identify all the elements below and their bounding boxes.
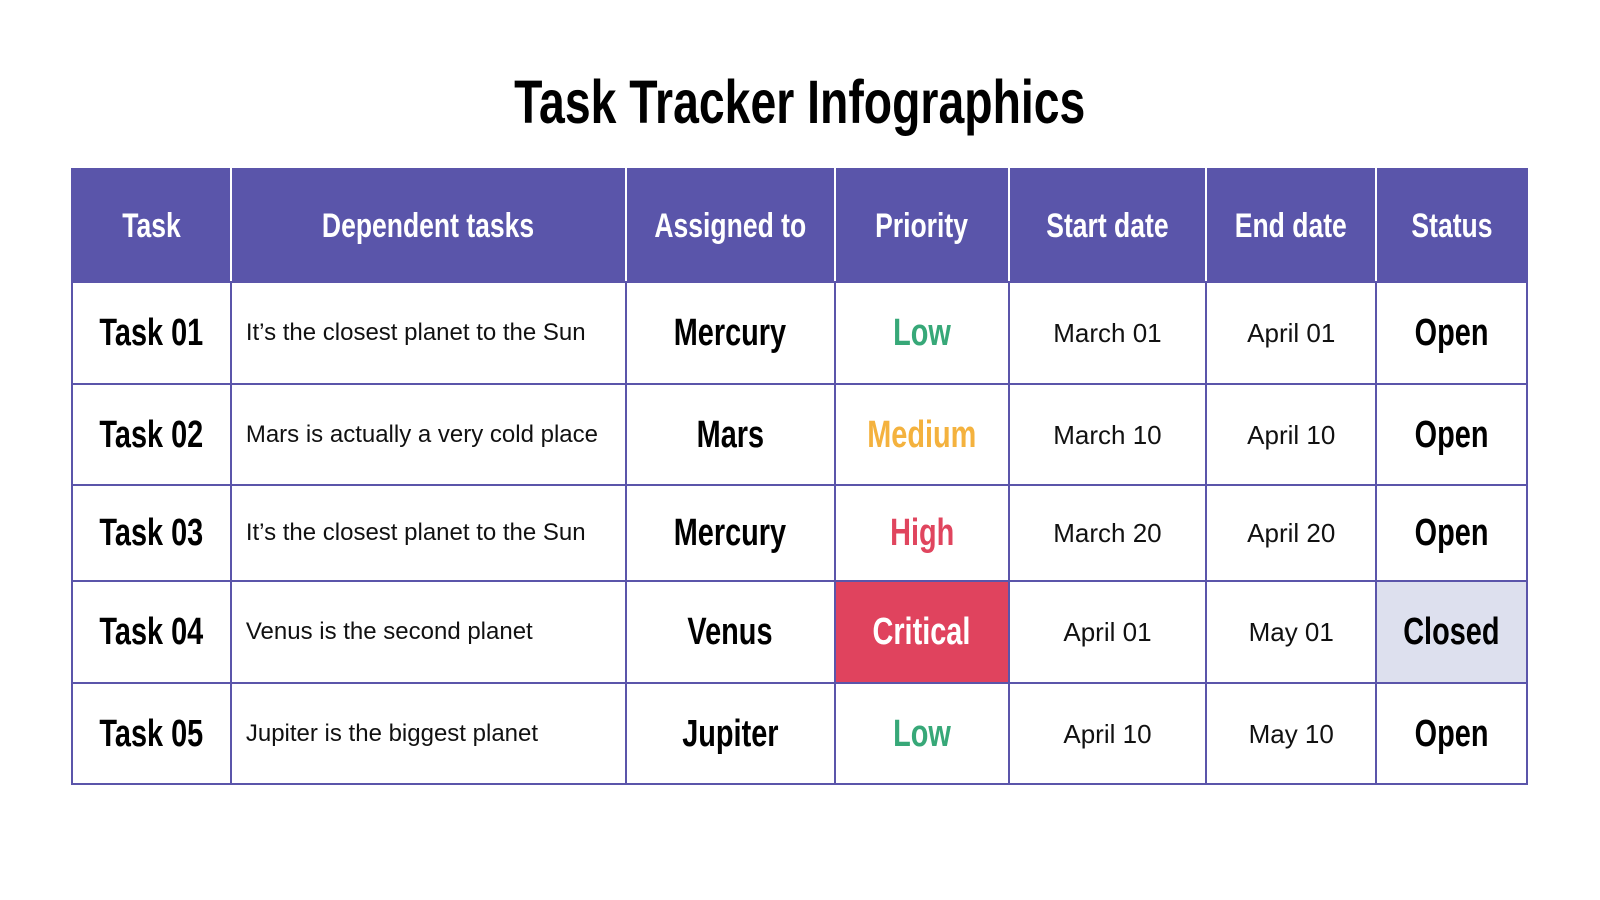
table: task tracker: It’s the closest planet to the Sun bbox=[246, 519, 586, 546]
table: task tracker: Task 05 bbox=[100, 712, 203, 754]
title: Task Tracker Infographics bbox=[514, 68, 1086, 136]
table: task tracker: Low bbox=[893, 712, 951, 754]
table: task tracker: Critical bbox=[873, 611, 971, 653]
table: task tracker: April 01 bbox=[1063, 617, 1152, 647]
table: task tracker: March 01 bbox=[1053, 318, 1162, 348]
table: task tracker: March 20 bbox=[1053, 518, 1162, 548]
table: task tracker: Jupiter is the biggest planet bbox=[246, 720, 538, 746]
table: task tracker: Mercury bbox=[674, 512, 787, 554]
table: task tracker: High bbox=[890, 512, 954, 554]
table: task tracker: End date bbox=[1235, 206, 1347, 244]
table: task tracker: Status bbox=[1411, 206, 1492, 244]
table: task tracker: April 20 bbox=[1247, 518, 1335, 548]
table: task tracker: Venus is the second planet bbox=[246, 618, 533, 645]
table: task tracker: Open bbox=[1415, 312, 1488, 354]
table: task tracker: Task 03 bbox=[100, 512, 203, 554]
table: task tracker: Open bbox=[1415, 512, 1488, 554]
table: task tracker: Open bbox=[1415, 414, 1488, 456]
table: task tracker: Jupiter bbox=[682, 712, 779, 754]
table: task tracker: Closed bbox=[1403, 611, 1500, 653]
table: task tracker: Low bbox=[893, 312, 951, 354]
table: task tracker: Medium bbox=[867, 414, 976, 456]
table: task tracker: Mars is actually a very cold place bbox=[246, 420, 598, 448]
table: task tracker: Priority bbox=[875, 206, 968, 244]
table: task tracker: May 10 bbox=[1249, 718, 1334, 748]
table: task tracker: Open bbox=[1415, 712, 1488, 754]
table: task tracker: April 01 bbox=[1247, 318, 1335, 348]
table: task tracker: April 10 bbox=[1247, 420, 1335, 450]
table: task tracker: Mars bbox=[697, 414, 764, 456]
table: task tracker: Start date bbox=[1046, 206, 1169, 244]
table: task tracker: Task 02 bbox=[100, 414, 203, 456]
table: task tracker: Task 01 bbox=[100, 312, 203, 354]
table: task tracker: It’s the closest planet to the Sun bbox=[246, 319, 586, 346]
table: task tracker: Mercury bbox=[674, 312, 787, 354]
table: task tracker: Dependent tasks bbox=[322, 206, 534, 244]
table: task tracker: Venus bbox=[688, 611, 773, 653]
table: task tracker: March 10 bbox=[1053, 420, 1162, 450]
table: task tracker: Task bbox=[122, 206, 181, 244]
table: task tracker bbox=[71, 168, 1528, 785]
table: task tracker: April 10 bbox=[1063, 718, 1152, 748]
table: task tracker: Task 04 bbox=[100, 611, 203, 653]
table: task tracker: May 01 bbox=[1249, 617, 1334, 647]
table: task tracker: Assigned to bbox=[654, 206, 806, 244]
